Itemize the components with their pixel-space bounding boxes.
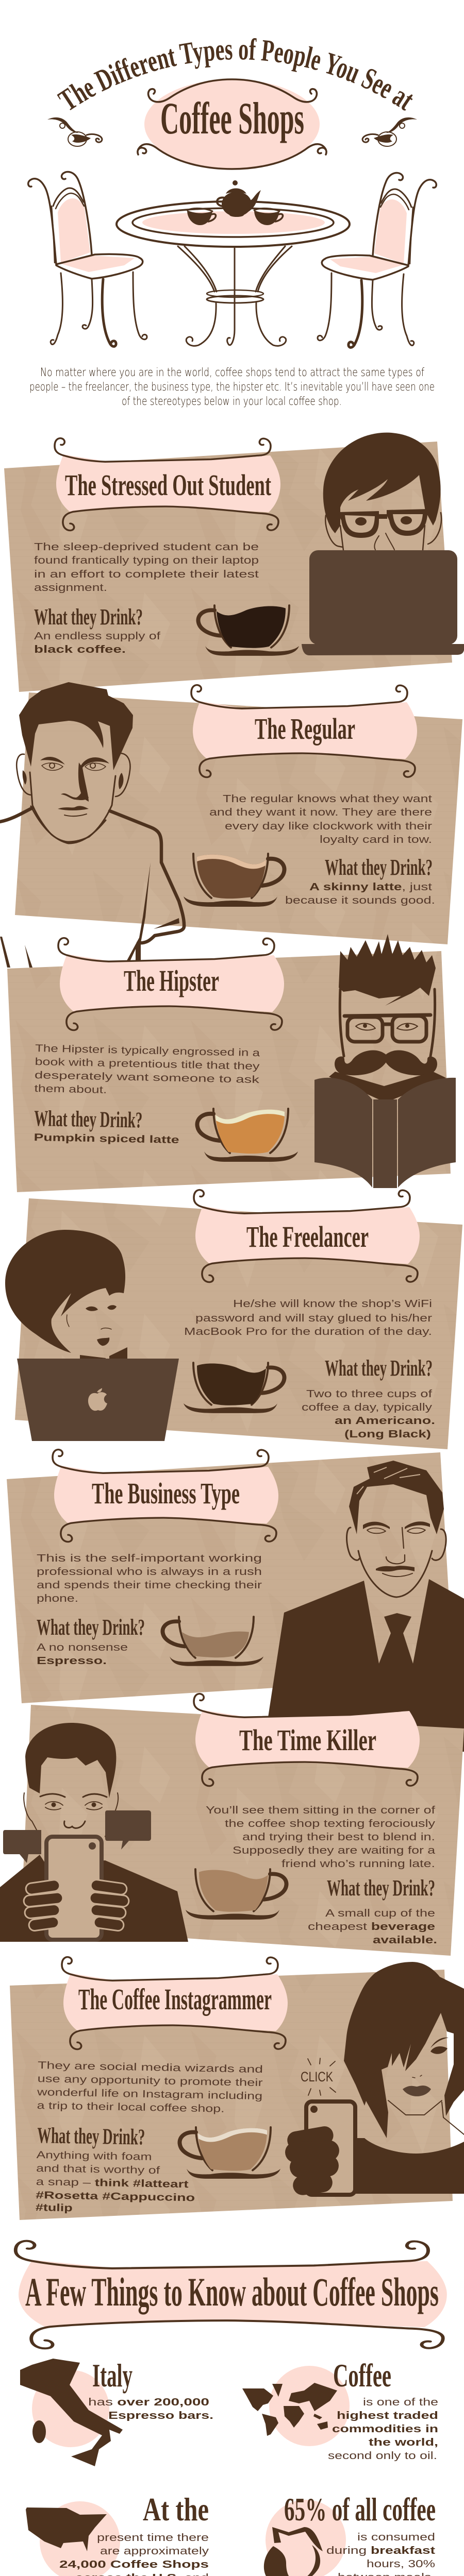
drink: What they Drink? — [37, 1615, 145, 1640]
banner — [55, 438, 280, 531]
drink — [285, 855, 435, 906]
description: use any opportunity to promote their — [37, 2073, 263, 2089]
text: the world, — [369, 2437, 438, 2448]
text: At the — [143, 2491, 209, 2528]
sign: Coffee Shops: Coffee Shops — [160, 94, 304, 144]
banner — [62, 1957, 288, 2049]
heading: The Time Killer: The Time Killer — [239, 1723, 376, 1757]
description: friend who’s running late. — [281, 1858, 435, 1870]
icon: pumpkin latte cup — [197, 1109, 298, 1162]
icon: skinny latte cup — [184, 854, 285, 907]
icon: smartphone — [46, 1837, 102, 1940]
fact: 65% of all coffee — [264, 2491, 436, 2576]
icon: map of the USA — [26, 2507, 107, 2551]
drink: available. — [373, 1935, 437, 1946]
drink — [37, 1615, 145, 1667]
description: phone. — [37, 1593, 78, 1604]
description: in an effort to complete their latest — [34, 569, 259, 580]
icon: phone — [306, 2102, 355, 2195]
character: the regular man — [0, 682, 184, 968]
text: during breakfast — [326, 2545, 435, 2556]
icon: foam latte cup — [179, 2127, 280, 2179]
illustration: left chair — [28, 172, 147, 346]
illustration: right chair — [318, 173, 436, 347]
drink: What they Drink? — [37, 2123, 145, 2150]
description: The sleep-deprived student can be — [34, 541, 259, 553]
title: The Different Types of People You See at: The Different Types of People You See at — [57, 38, 413, 111]
description: book with a pretentious title that they — [35, 1056, 260, 1072]
drink: a snap – think #latteart — [36, 2176, 189, 2190]
text — [51, 2491, 209, 2576]
text: are approximately — [100, 2546, 209, 2557]
banner — [194, 1694, 420, 1786]
description: every day like clockwork with their — [225, 821, 432, 832]
description: desperately want someone to ask — [35, 1070, 260, 1086]
character: woman photographing coffee — [285, 1962, 464, 2196]
text: Italy — [92, 2357, 132, 2394]
icon: left flourish — [47, 117, 102, 146]
drink: and that is worthy of — [36, 2163, 160, 2176]
drink — [308, 1875, 437, 1946]
text — [328, 2357, 438, 2462]
banner — [194, 1190, 420, 1282]
description: They are social media wizards and — [38, 2060, 263, 2075]
description: MacBook Pro for the duration of the day. — [184, 1326, 432, 1337]
icon: open laptop with apple logo — [17, 1359, 179, 1441]
banner — [58, 938, 284, 1030]
description: password and will stay glued to his/her — [195, 1313, 432, 1324]
description — [34, 1043, 261, 1099]
icon: camera lens — [89, 1842, 96, 1850]
drink: An endless supply of — [34, 631, 161, 642]
description — [37, 1553, 262, 1604]
description — [184, 1298, 432, 1337]
text — [284, 2491, 436, 2576]
description: You’ll see them sitting in the corner of — [206, 1805, 436, 1816]
icon: laptop — [302, 550, 464, 655]
description: The Hipster is typically engrossed in a — [35, 1043, 260, 1059]
description: assignment. — [34, 582, 107, 594]
icon: coffee carafe — [264, 2527, 323, 2576]
description: the coffee shop texting ferociously — [225, 1818, 435, 1829]
description — [206, 1805, 436, 1870]
text: second only to oil. — [328, 2450, 437, 2462]
drink: because it sounds good. — [285, 895, 435, 906]
label: CLICK — [301, 2058, 336, 2095]
text: 24,000 Coffee Shops — [59, 2559, 209, 2570]
drink: #Rosetta #Cappuccino — [36, 2190, 195, 2204]
banner — [53, 1450, 278, 1542]
text: has over 200,000 — [88, 2397, 209, 2408]
icon: map of Italy — [20, 2359, 123, 2466]
description: found frantically typing on their laptop — [34, 555, 259, 566]
drink: What they Drink? — [34, 1106, 143, 1133]
fact: US coffee shops — [26, 2491, 209, 2576]
drink — [302, 1355, 435, 1440]
panel: The Freelancer — [5, 1190, 462, 1449]
drink: Two to three cups of — [306, 1388, 433, 1400]
heading: The Freelancer: The Freelancer — [246, 1220, 369, 1253]
icon: teapot — [217, 180, 261, 217]
description: Supposedly they are waiting for a — [233, 1845, 436, 1856]
description — [36, 2060, 263, 2115]
drink: Anything with foam — [36, 2149, 152, 2163]
drink: an Americano. — [335, 1415, 435, 1427]
panel: The Time Killer — [0, 1694, 464, 1956]
character: business man in suit — [268, 1461, 464, 1752]
text: Coffee — [333, 2357, 391, 2394]
icon: fingers — [23, 1879, 129, 1931]
description: and spends their time checking their — [37, 1580, 262, 1591]
text: commodities in — [332, 2424, 438, 2435]
icon: speech bubbles — [3, 1810, 151, 1863]
drink: A skinny latte , just — [309, 882, 433, 893]
drink — [36, 2123, 196, 2216]
icon: right flourish — [362, 117, 417, 146]
drink: Espresso. — [37, 1655, 107, 1667]
icon: small cup — [186, 1869, 287, 1920]
label: CLICK: CLICK — [301, 2069, 333, 2084]
drink — [34, 1106, 180, 1146]
intro text — [29, 366, 435, 408]
panel: The Hipster — [7, 934, 456, 1192]
drink: A small cup of the — [325, 1908, 435, 1919]
description: them about. — [34, 1083, 107, 1096]
banner — [191, 685, 417, 777]
section banner — [15, 2241, 447, 2348]
text — [88, 2357, 213, 2421]
description: loyalty card in tow. — [320, 834, 432, 845]
heading: The Stressed Out Student: The Stressed Out Student — [65, 468, 271, 502]
text: is consumed — [357, 2532, 435, 2543]
drink: Pumpkin spiced latte — [34, 1132, 179, 1146]
heading: The Coffee Instagrammer: The Coffee Instagrammer — [78, 1982, 272, 2016]
text: Espresso bars. — [108, 2410, 213, 2421]
drink — [34, 604, 161, 655]
sign: Coffee Shops — [138, 79, 326, 169]
text: highest traded — [337, 2410, 438, 2421]
drink: coffee a day, typically — [302, 1402, 432, 1413]
icon: americano cup — [184, 1363, 285, 1413]
heading: The Hipster: The Hipster — [124, 964, 219, 997]
icon: world map — [242, 2383, 337, 2436]
panel: The Regular — [0, 682, 462, 968]
description: He/she will know the shop’s WiFi — [233, 1298, 432, 1310]
description: a trip to their local coffee shop. — [37, 2100, 225, 2115]
text: hours, 30% — [367, 2558, 435, 2570]
drink: cheapest beverage — [308, 1921, 435, 1933]
drink: black coffee. — [34, 644, 126, 655]
icon: black coffee cup — [198, 605, 299, 656]
drink: (Long Black) — [344, 1429, 431, 1440]
description: and they want it now. They are there — [209, 807, 432, 818]
icon: phone camera — [310, 2106, 318, 2113]
character: hipster reading book — [314, 934, 456, 1188]
description — [209, 793, 433, 845]
fact: Coffee commodity — [242, 2357, 438, 2462]
text: present time there — [97, 2532, 209, 2544]
icon: espresso cup — [162, 1617, 263, 1666]
drink: #tulip — [36, 2202, 73, 2214]
description: The regular knows what they want — [223, 793, 433, 805]
character: freelancer with laptop — [5, 1230, 179, 1441]
drink: What they Drink? — [34, 604, 143, 630]
icon: book — [314, 1078, 456, 1188]
character: student with glasses behind laptop — [302, 433, 464, 655]
description — [34, 541, 259, 594]
drink: A no nonsense — [37, 1642, 128, 1653]
description: professional who is always in a rush — [37, 1566, 262, 1578]
panel: The Business Type — [7, 1450, 464, 1752]
description: and trying their best to blend in. — [242, 1832, 435, 1843]
illustration: table with tea set — [117, 180, 350, 346]
description: This is the self-important working — [37, 1553, 262, 1564]
icon: fist — [285, 2125, 340, 2196]
character: time killer texting — [0, 1723, 188, 1942]
heading: The Regular: The Regular — [255, 712, 355, 745]
panel: The Coffee Instagrammer — [10, 1957, 464, 2220]
panel: The Stressed Out Student — [4, 433, 464, 692]
intro text: of the stereotypes below in your local coffee shop. — [122, 395, 342, 408]
fact: Italy — [20, 2357, 213, 2466]
description: wonderful life on Instagram including — [37, 2087, 262, 2102]
heading: The Business Type: The Business Type — [92, 1477, 240, 1510]
text: is one of the — [363, 2397, 438, 2408]
